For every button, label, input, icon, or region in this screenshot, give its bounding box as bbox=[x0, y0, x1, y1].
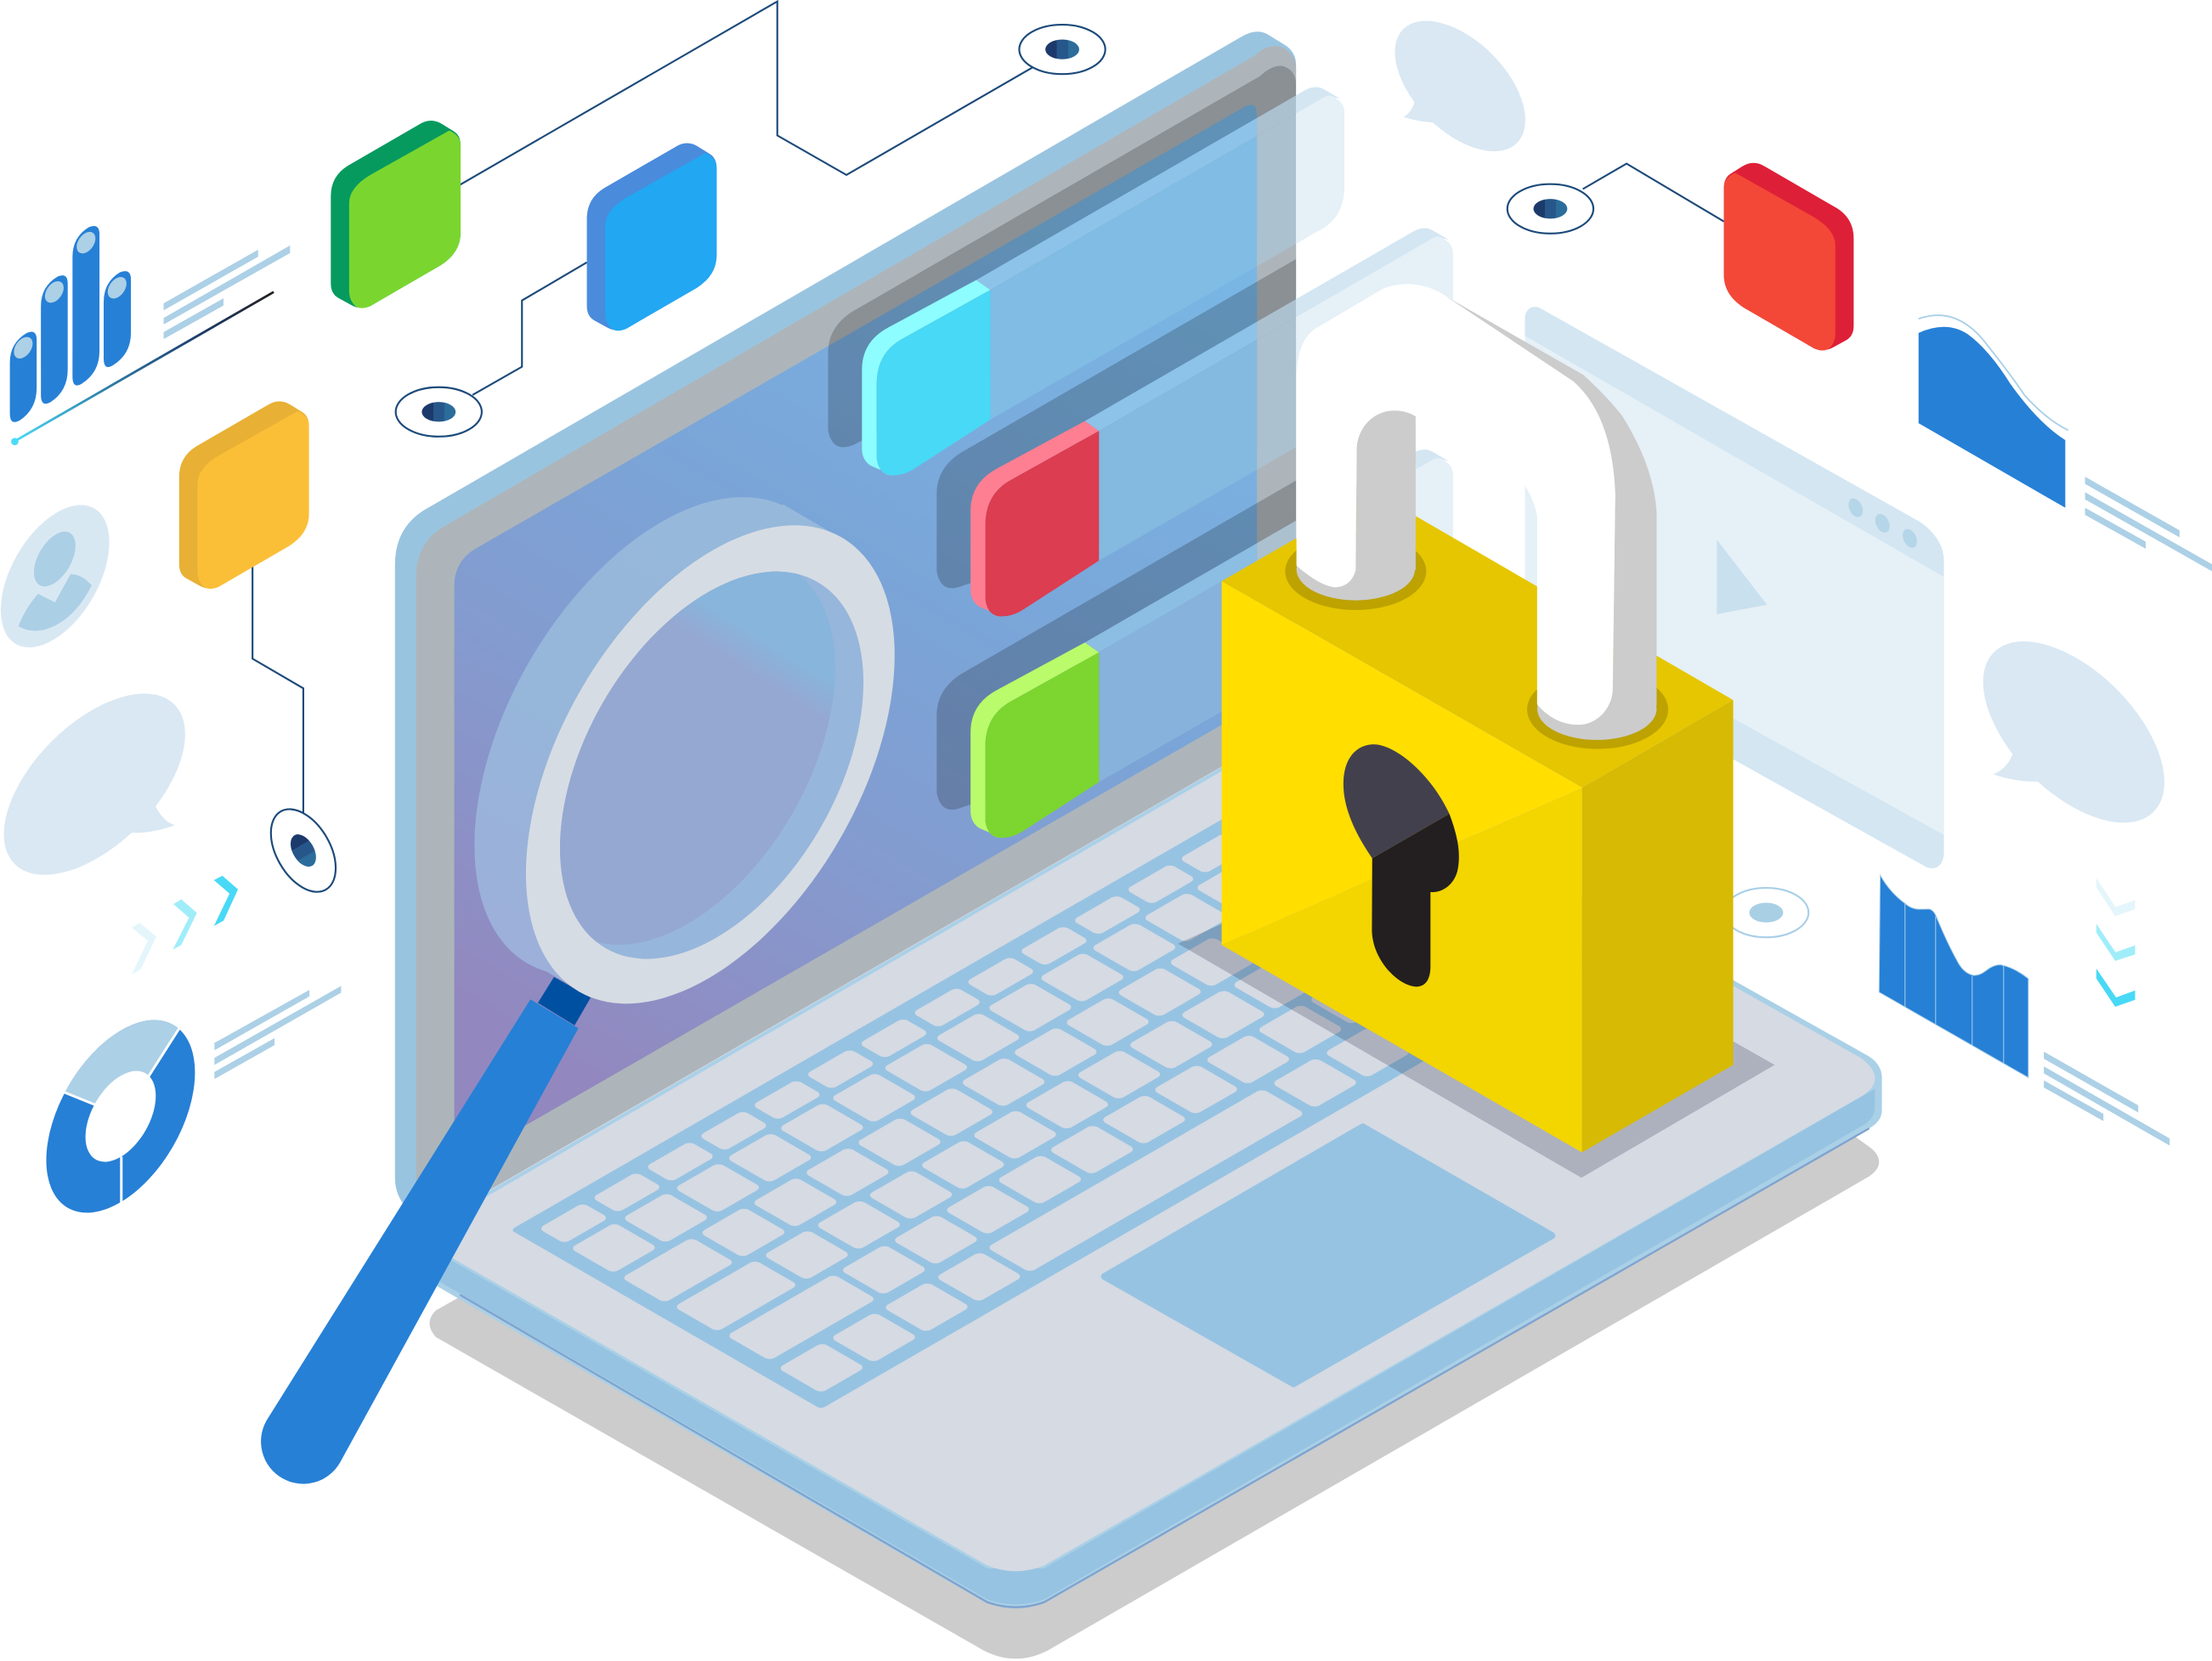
text lines: top right bbox=[2085, 477, 2212, 571]
window dots bbox=[1846, 496, 1920, 550]
chevrons: left bbox=[132, 876, 238, 975]
node: faded eye bbox=[1724, 888, 1808, 937]
browser window panel bbox=[1525, 307, 1944, 868]
shackle holes bbox=[1285, 533, 1426, 610]
lock shadow bbox=[1178, 924, 1774, 1178]
laptop drop shadow bbox=[429, 1121, 1879, 1658]
padlock bbox=[1222, 284, 1734, 1152]
node: right eye bbox=[1508, 184, 1593, 234]
chevrons: right bbox=[2096, 878, 2136, 1007]
speech bubble: top bbox=[1372, 0, 1549, 175]
shackle bbox=[1297, 284, 1656, 740]
column chart bbox=[10, 226, 274, 445]
icon: profile bubble bbox=[0, 487, 132, 666]
screen row 1: cyan bbox=[828, 65, 1344, 475]
keyboard bbox=[511, 778, 1603, 1409]
bar area chart: lower right bbox=[1879, 875, 2028, 1077]
icon: red card bbox=[1724, 163, 1853, 351]
chart axis line bbox=[11, 292, 274, 445]
connector lines bbox=[252, 2, 1724, 816]
magnifier handle bbox=[261, 999, 579, 1483]
text lines: bottom right bbox=[2044, 1052, 2170, 1145]
speech bubble: right bbox=[1951, 609, 2197, 855]
node: top eye bbox=[1019, 25, 1106, 74]
icon: orange card bbox=[179, 401, 309, 589]
magnifying glass bbox=[261, 462, 971, 1483]
laptop base bbox=[423, 705, 1882, 1608]
touchpad bbox=[1105, 1127, 1552, 1384]
keyhole bbox=[1344, 744, 1459, 986]
text lines: top left bbox=[164, 246, 290, 339]
laptop screen bbox=[395, 31, 1296, 1224]
speech bubble: left bbox=[0, 662, 218, 907]
area chart: top right bbox=[1919, 315, 2068, 508]
screen row 2: red bbox=[936, 228, 1453, 617]
icon: blue card bbox=[587, 144, 716, 331]
node: lower-left eye bbox=[257, 798, 349, 903]
text lines: bottom left bbox=[214, 986, 341, 1079]
screen row 3: green bbox=[936, 449, 1453, 838]
node: left eye bbox=[396, 387, 482, 437]
donut chart bbox=[46, 1020, 195, 1213]
play triangle bbox=[1717, 540, 1767, 614]
icon: green card bbox=[331, 121, 461, 308]
